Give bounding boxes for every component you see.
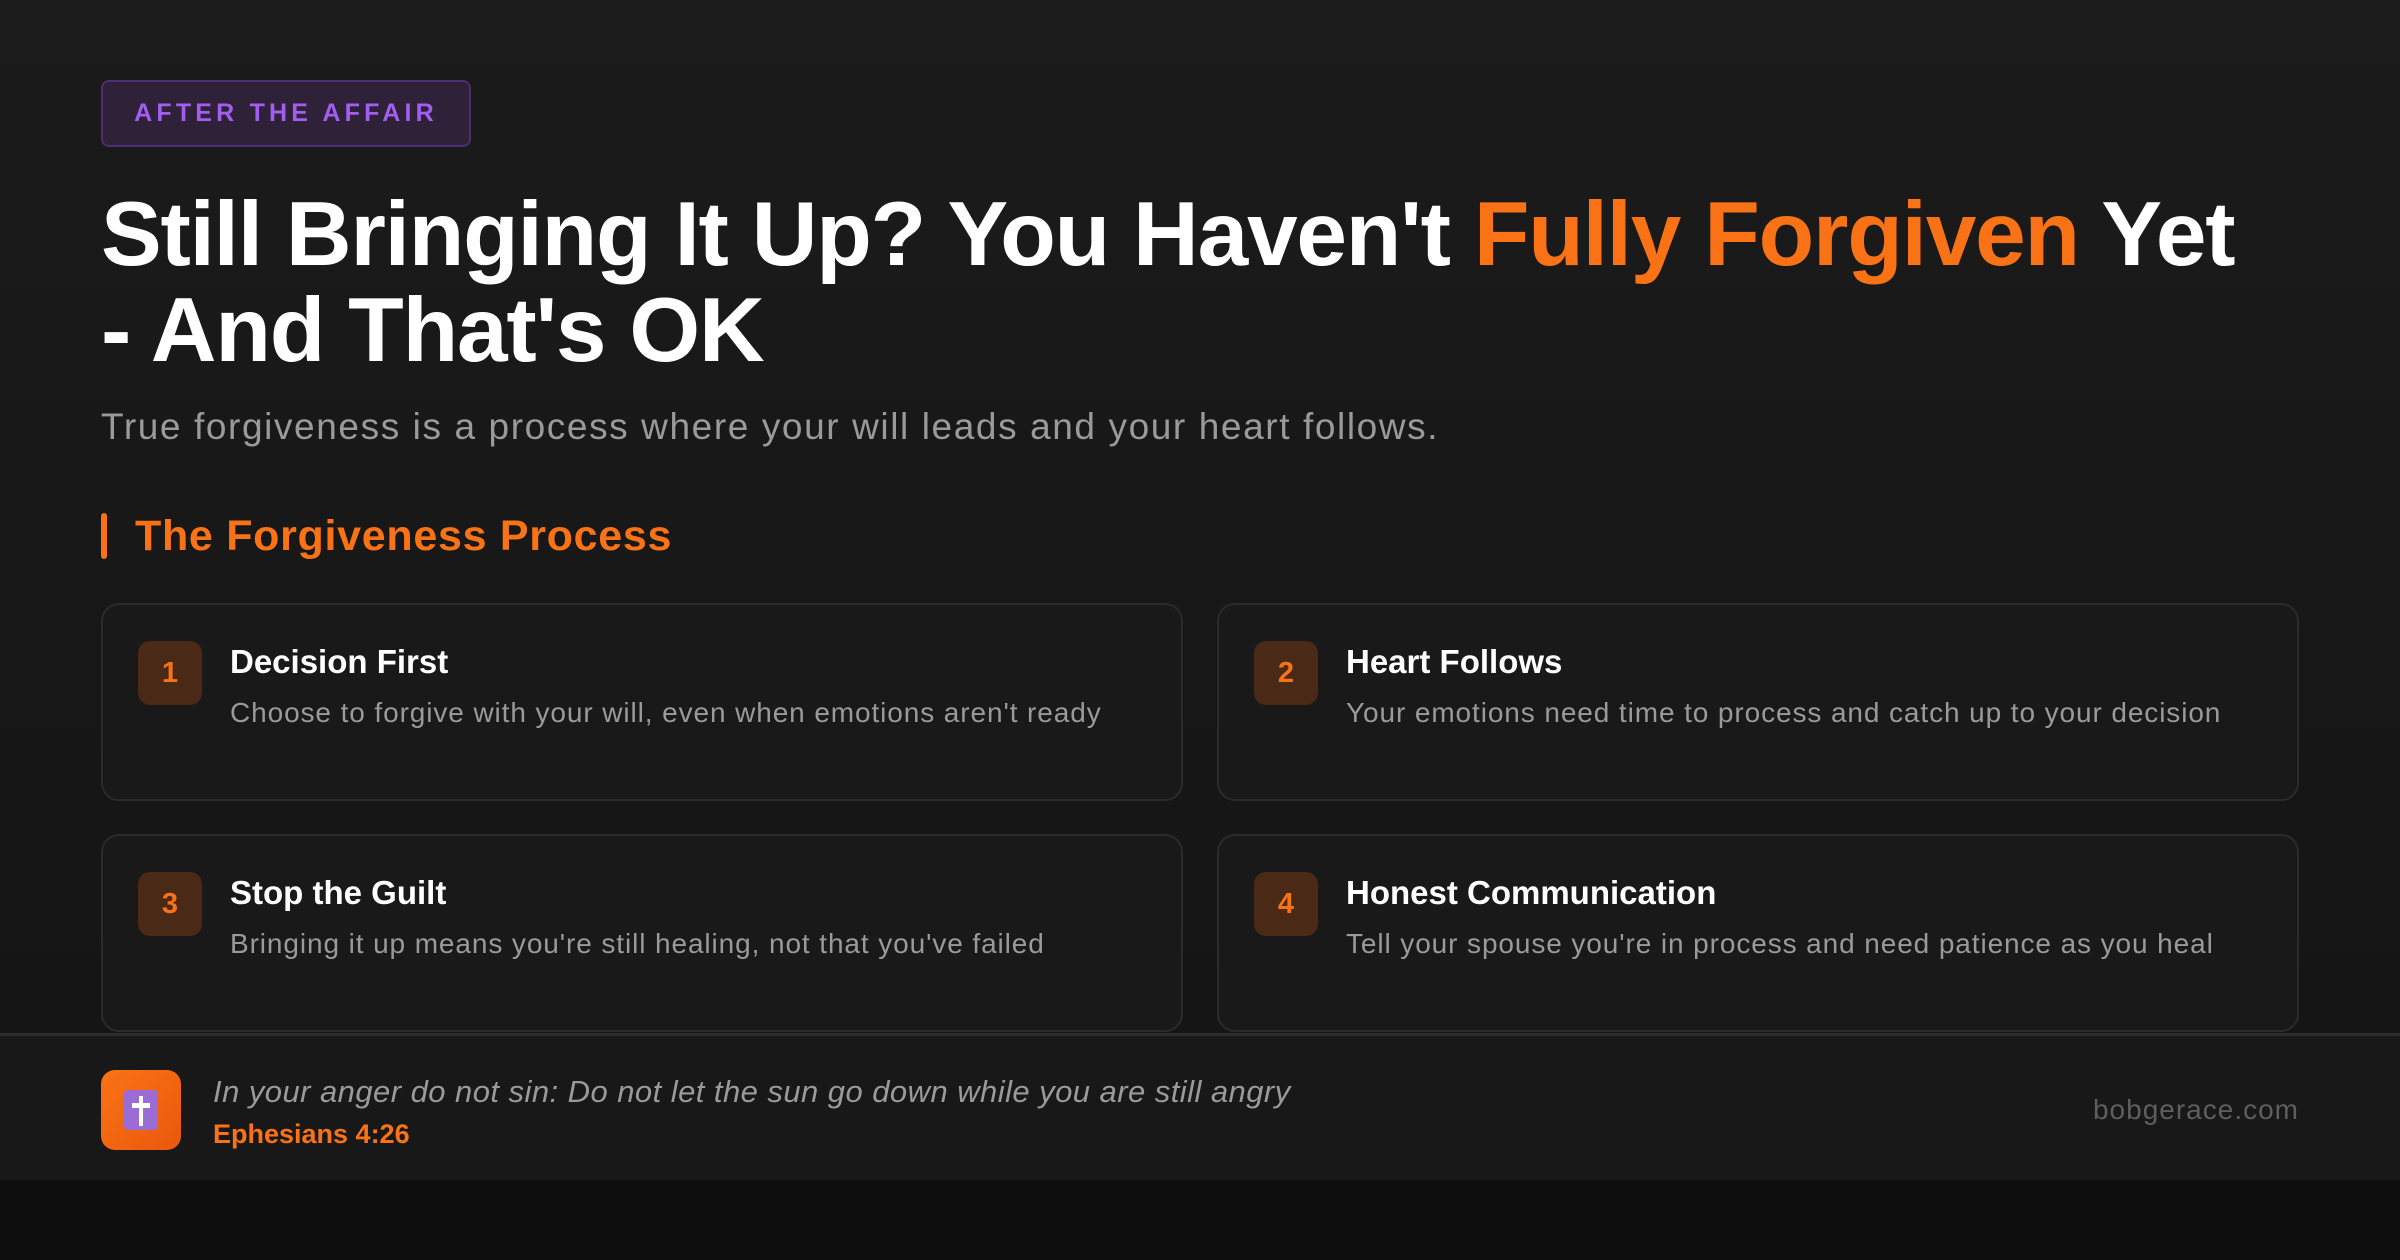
card 2: heart follows: 2 (1278, 656, 1294, 688)
title: Still Bringing It Up? You Haven't Fully Forgiven Yet (101, 184, 2234, 285)
card 1: decision first: Choose to forgive with your will, even when emotions aren't ready (230, 697, 1102, 728)
card 3: stop the guilt (101, 834, 1183, 1032)
section heading: The Forgiveness Process (135, 512, 672, 560)
icon: cross (101, 1070, 181, 1150)
card 4: honest communication (1217, 834, 2299, 1032)
card 3: stop the guilt: Stop the Guilt (230, 874, 446, 911)
reference: Ephesians 4:26 (213, 1119, 410, 1149)
card 2: heart follows (1217, 603, 2299, 801)
badge: after the affair: AFTER THE AFFAIR (134, 99, 438, 127)
card 3: stop the guilt: 3 (162, 888, 178, 920)
badge: after the affair (101, 80, 471, 147)
card 2: heart follows: Your emotions need time to process and catch up to your decision (1346, 697, 2221, 728)
card 4: honest communication: 4 (1278, 888, 1294, 920)
quote: In your anger do not sin: Do not let the sun go down while you are still angry (213, 1074, 1291, 1109)
title (101, 184, 2234, 381)
footer (0, 1033, 2400, 1180)
card 2: heart follows: Heart Follows (1346, 643, 1562, 680)
card 4: honest communication: Honest Communication (1346, 874, 1716, 911)
card 1: decision first: 1 (162, 656, 178, 688)
card 4: honest communication: Tell your spouse you're in process and need patience as you heal (1346, 928, 2214, 959)
card 3: stop the guilt: Bringing it up means you're still healing, not that you've failed (230, 928, 1045, 959)
card 1: decision first (101, 603, 1183, 801)
card 1: decision first: Decision First (230, 643, 448, 680)
subtitle: True forgiveness is a process where your will leads and your heart follows. (101, 406, 1439, 447)
title: - And That's OK (101, 280, 764, 381)
site url: bobgerace.com (2093, 1094, 2299, 1125)
